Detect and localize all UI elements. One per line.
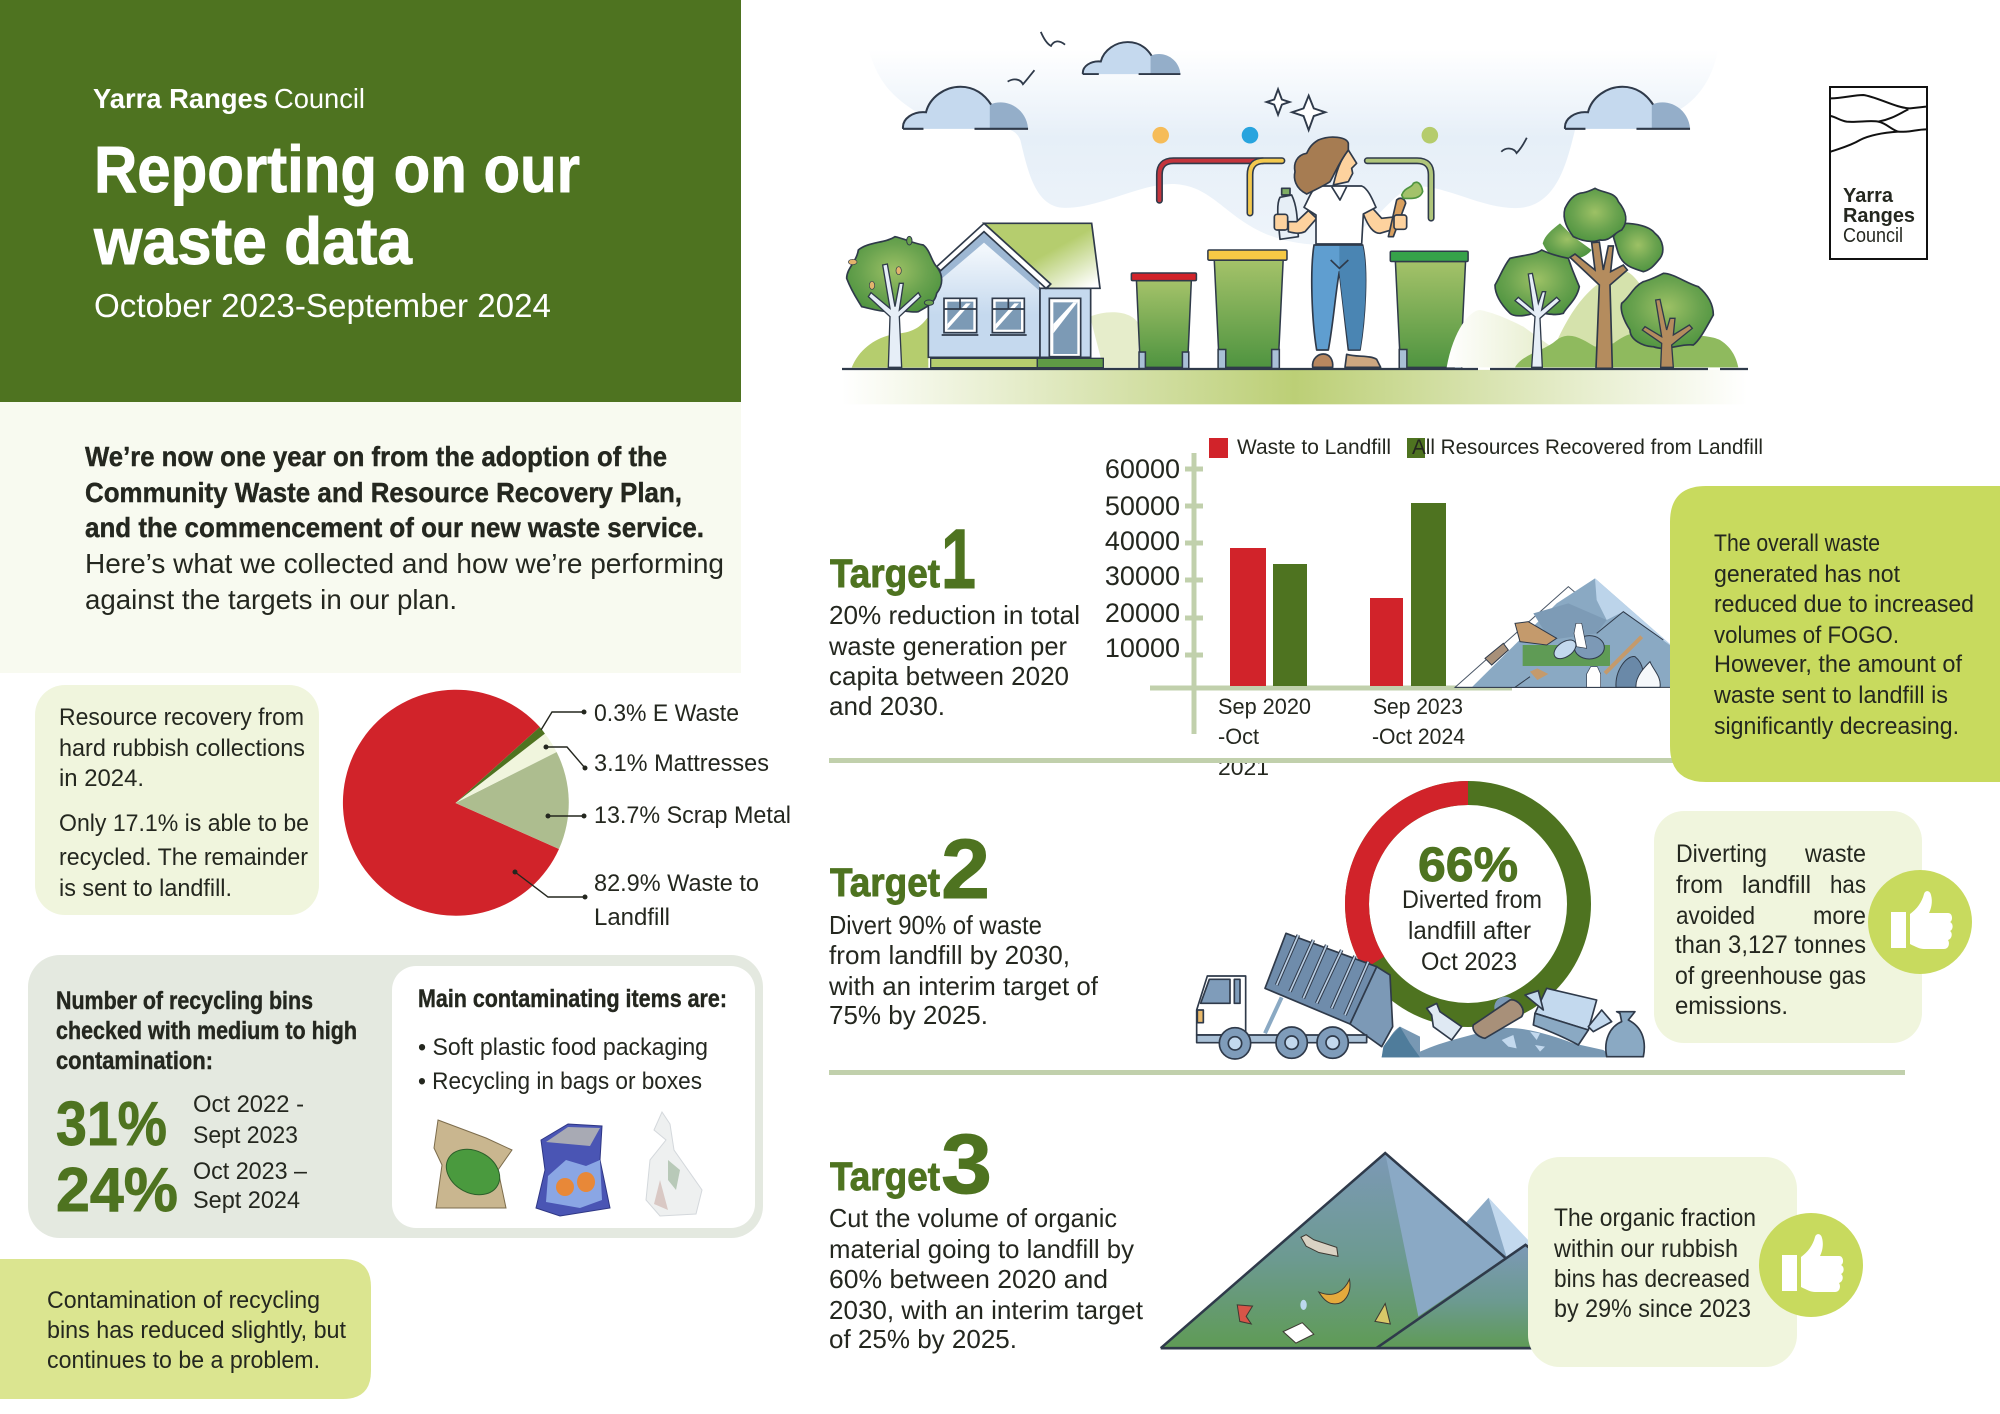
- target 2 description: [828, 910, 1099, 1030]
- panel: main contaminating items: • Recycling in bags or boxes: [418, 1068, 702, 1095]
- intro panel: Community Waste and Resource Recovery Plan,: [85, 477, 682, 508]
- contamination heading: Number of recycling bins: [56, 987, 313, 1015]
- target 3 heading: Target: [830, 1155, 940, 1199]
- x-axis labels: [1218, 694, 1465, 780]
- bar chart: waste to landfill vs recovered: [1105, 436, 1763, 780]
- callout: greenhouse gas benefit: has: [1830, 871, 1866, 899]
- pie leader lines: [512, 710, 588, 900]
- donut chart: 66% diverted: 66%: [1418, 839, 1518, 892]
- callout: greenhouse gas benefit: more: [1813, 902, 1866, 930]
- callout: target 1 outcome: waste sent to landfill is: [1713, 682, 1948, 709]
- stat: 31%: Oct 2022 -: [193, 1091, 304, 1118]
- x-axis labels: Sep 2023: [1373, 694, 1463, 719]
- icon: thumbs up: [1868, 870, 1972, 974]
- target 1 heading: 1: [941, 512, 976, 606]
- intro panel: and the commencement of our new waste service.: [85, 512, 704, 543]
- callout: target 1 outcome: generated has not: [1714, 561, 1900, 588]
- x-axis labels: -Oct: [1218, 724, 1259, 749]
- target 3 heading: [830, 1117, 992, 1211]
- section divider 1: [829, 758, 1689, 763]
- y-axis labels: 40000: [1105, 526, 1180, 556]
- logo: Yarra Ranges Council: [1830, 87, 1927, 259]
- target 2 description: from landfill by 2030,: [829, 940, 1070, 970]
- callout: hard rubbish recovery: is sent to landfill.: [59, 875, 232, 902]
- illustration: tipping truck and rubbish: [1197, 933, 1644, 1059]
- callout: hard rubbish recovery: Only 17.1% is able to be: [59, 810, 309, 837]
- x-axis labels: -Oct 2024: [1372, 724, 1465, 749]
- target 2 description: 75% by 2025.: [829, 1000, 988, 1030]
- stat: 24%: Sept 2024: [193, 1187, 300, 1214]
- target 1 description: waste generation per: [828, 631, 1067, 661]
- council name: [93, 83, 365, 114]
- right tree group: [1447, 188, 1738, 368]
- section divider 2: [829, 1070, 1905, 1075]
- food scraps: [1237, 1235, 1390, 1343]
- donut chart: 66% diverted: [1357, 793, 1579, 1015]
- panel: main contaminating items: [392, 966, 755, 1228]
- callout: greenhouse gas benefit: waste: [1804, 840, 1866, 868]
- target 2 description: Divert 90% of waste: [829, 910, 1042, 940]
- house and left tree: [847, 223, 1138, 368]
- callout: hard rubbish recovery: Resource recovery from: [59, 704, 304, 731]
- intro panel: Here’s what we collected and how we’re performing: [85, 548, 724, 579]
- target 2 heading: [830, 822, 990, 916]
- callout: target 1 outcome: However, the amount of: [1714, 651, 1962, 678]
- title: waste data: [93, 204, 413, 278]
- y-axis labels: 60000: [1105, 454, 1180, 484]
- y-axis labels: 50000: [1105, 491, 1180, 521]
- y-axis labels: [1105, 454, 1180, 663]
- callout: greenhouse gas benefit: Diverting: [1676, 840, 1767, 868]
- sky, clouds and birds: [842, 32, 1747, 404]
- council name: Council: [274, 83, 365, 114]
- panel: main contaminating items: • Soft plastic food packaging: [418, 1034, 708, 1061]
- callout: hard rubbish recovery: hard rubbish collections: [59, 735, 305, 762]
- callout: target 1 outcome: [1670, 486, 2000, 782]
- target 1 heading: Target: [830, 552, 940, 596]
- illustration: organic waste mountains: [1161, 1153, 1582, 1348]
- callout: hard rubbish recovery: in 2024.: [59, 765, 144, 792]
- pie labels: [594, 700, 791, 931]
- callout: hard rubbish recovery: [35, 685, 319, 915]
- bars: [1230, 503, 1446, 686]
- callout: target 1 outcome: significantly decreasing.: [1714, 713, 1959, 740]
- callout: contamination outcome: [0, 1259, 371, 1399]
- logo: Yarra Ranges Council: Yarra: [1843, 185, 1894, 207]
- callout: greenhouse gas benefit: of greenhouse gas: [1675, 962, 1866, 990]
- target 1 description: [828, 600, 1080, 721]
- pie labels: 3.1% Mattresses: [594, 750, 769, 777]
- callout: hard rubbish recovery: recycled. The remainder: [59, 844, 308, 871]
- target 2 description: with an interim target of: [828, 971, 1099, 1001]
- stat: 31%: Sept 2023: [193, 1122, 298, 1149]
- target 1 description: capita between 2020: [829, 661, 1069, 691]
- chart legend: All Resources Recovered from Landfill: [1412, 436, 1763, 459]
- callout: organic fraction: within our rubbish: [1553, 1235, 1738, 1263]
- donut chart: 66% diverted: Oct 2023: [1421, 948, 1517, 976]
- title: Reporting on our: [94, 132, 580, 206]
- callout: organic fraction: The organic fraction: [1554, 1204, 1756, 1232]
- icon: blue chip packet: [536, 1124, 610, 1216]
- pie labels: 82.9% Waste to: [594, 870, 759, 897]
- icon: clear plastic bag: [646, 1112, 702, 1216]
- panel: main contaminating items: Main contaminating items are:: [418, 985, 727, 1013]
- illustration: waste mountain: [1455, 578, 1677, 687]
- icon: thumbs up: [1759, 1213, 1863, 1317]
- target 3 description: material going to landfill by: [829, 1234, 1134, 1264]
- callout: organic fraction: by 29% since 2023: [1554, 1295, 1751, 1323]
- pie labels: 13.7% Scrap Metal: [594, 802, 791, 829]
- contamination heading: [56, 987, 357, 1075]
- logo: Yarra Ranges Council: Ranges: [1843, 205, 1915, 227]
- stat: 31%: [56, 1090, 304, 1159]
- chart axes: [1150, 453, 1512, 734]
- stat: 24%: [56, 1156, 308, 1225]
- target 1 description: and 2030.: [829, 691, 945, 721]
- y-axis labels: 20000: [1105, 598, 1180, 628]
- date range: October 2023-September 2024: [94, 287, 551, 324]
- callout: greenhouse gas benefit: landfill: [1742, 871, 1811, 899]
- target 3 description: Cut the volume of organic: [829, 1203, 1117, 1233]
- target 2 block: [828, 822, 1099, 1030]
- truck: [1197, 933, 1393, 1059]
- callout: contamination outcome: bins has reduced slightly, but: [47, 1317, 346, 1344]
- callout: greenhouse gas benefit: from: [1676, 871, 1723, 899]
- y-axis labels: 10000: [1105, 633, 1180, 663]
- callout: greenhouse gas benefit: avoided: [1676, 902, 1755, 930]
- intro panel: We’re now one year on from the adoption of the: [85, 441, 667, 472]
- panel: recycling bin contamination: [28, 955, 763, 1238]
- target 3 description: of 25% by 2025.: [829, 1324, 1017, 1354]
- callout: target 1 outcome: The overall waste: [1714, 530, 1880, 557]
- callout: contamination outcome: Contamination of recycling: [47, 1287, 320, 1314]
- icon: paper food bag: [434, 1120, 512, 1208]
- callout: contamination outcome: continues to be a problem.: [47, 1347, 320, 1374]
- pie chart: hard rubbish composition: [343, 690, 791, 931]
- callout: greenhouse gas benefit: than 3,127 tonnes: [1675, 931, 1866, 959]
- pie labels: 0.3% E Waste: [594, 700, 739, 727]
- hero illustration: household bins scene: [842, 32, 1748, 404]
- contamination heading: contamination:: [56, 1047, 213, 1075]
- target 1 description: 20% reduction in total: [829, 600, 1080, 630]
- intro panel: against the targets in our plan.: [85, 584, 457, 615]
- contamination heading: checked with medium to high: [56, 1017, 357, 1045]
- target 2 heading: Target: [830, 861, 940, 905]
- callout: target 1 outcome: volumes of FOGO.: [1714, 622, 1899, 649]
- donut chart: 66% diverted: landfill after: [1408, 917, 1531, 945]
- target 3 block: [829, 1117, 1144, 1354]
- chart legend: Waste to Landfill: [1237, 436, 1391, 459]
- callout: organic fraction: bins has decreased: [1554, 1265, 1750, 1293]
- title: [93, 132, 580, 278]
- council name: Yarra Ranges: [93, 83, 268, 114]
- callout: organic fraction: [1528, 1157, 1797, 1367]
- target 1 block: [828, 512, 1080, 721]
- stat: 24%: 24%: [56, 1156, 178, 1225]
- donut chart: 66% diverted: Diverted from: [1402, 886, 1542, 914]
- person with bottle and food scrap: [1274, 137, 1423, 367]
- rubbish pile: [1382, 988, 1644, 1057]
- callout: target 1 outcome: reduced due to increased: [1714, 591, 1974, 618]
- x-axis labels: Sep 2020: [1218, 694, 1311, 719]
- stat: 31%: 31%: [56, 1090, 167, 1159]
- y-axis labels: 30000: [1105, 561, 1180, 591]
- header panel: [0, 0, 741, 402]
- callout: greenhouse gas benefit: emissions.: [1675, 992, 1788, 1020]
- pie labels: Landfill: [594, 904, 670, 931]
- chart legend: [1209, 436, 1763, 459]
- target 1 heading: [830, 512, 976, 606]
- logo: Yarra Ranges Council: Council: [1843, 225, 1903, 247]
- target 3 description: 60% between 2020 and: [829, 1264, 1108, 1294]
- target 2 heading: 2: [941, 822, 990, 916]
- target 3 description: [829, 1203, 1144, 1354]
- target 3 description: 2030, with an interim target: [829, 1295, 1144, 1325]
- wheelie bins: [1131, 250, 1468, 369]
- stat: 24%: Oct 2023 –: [193, 1158, 308, 1185]
- x-axis labels: 2021: [1218, 755, 1269, 780]
- intro panel: [0, 402, 741, 673]
- callout: greenhouse gas benefit: [1654, 811, 1922, 1043]
- ground line: [842, 368, 1748, 370]
- target 3 heading: 3: [941, 1117, 992, 1211]
